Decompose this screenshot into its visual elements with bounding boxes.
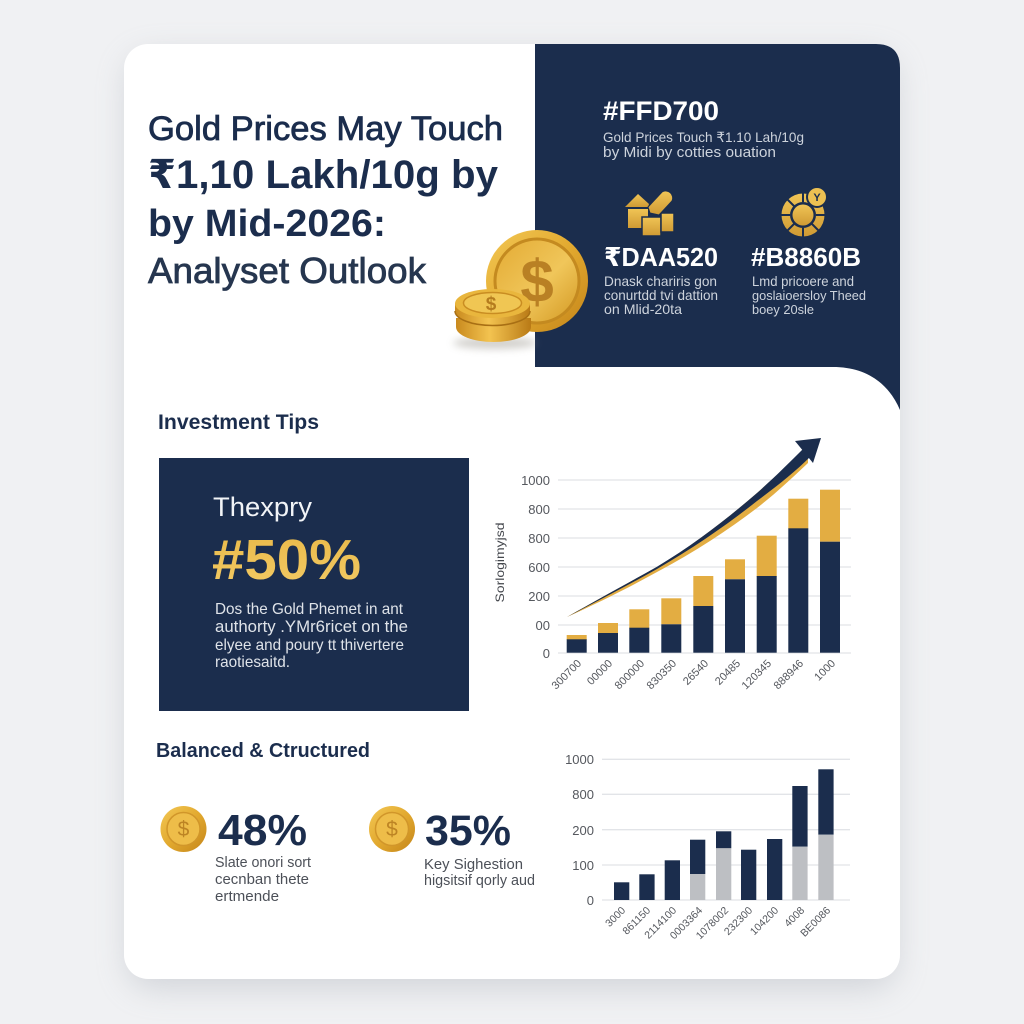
navy bar segments	[614, 769, 834, 900]
icon: coin 48: $	[178, 818, 190, 841]
x axis labels	[550, 658, 838, 692]
stat: 48%: Slate onori sort	[215, 854, 312, 871]
x axis labels: 2114100	[642, 905, 679, 941]
y axis labels: 800	[572, 787, 594, 802]
x axis labels: 104200	[748, 905, 781, 938]
icon: coin 35	[369, 806, 415, 852]
x axis labels: 830350	[645, 658, 679, 692]
panel: dark navy header block	[535, 44, 900, 410]
x axis labels: 300700	[550, 658, 584, 692]
stat: 48%: 48%	[218, 806, 307, 855]
x axis labels: 120345	[740, 658, 774, 692]
grey bar segments	[690, 835, 834, 900]
icon: coin 48	[160, 806, 206, 852]
y axis labels: 0	[543, 646, 550, 661]
gold bar segments	[567, 490, 840, 640]
illustration: gold coins: $	[486, 294, 497, 315]
x axis labels: 20485	[713, 658, 743, 688]
y axis labels: 1000	[565, 752, 594, 767]
stat: 35%: Key Sighestion	[424, 856, 523, 873]
x axis labels	[603, 905, 833, 942]
stat: DAA520	[604, 242, 718, 317]
callout body: Dos the Gold Phemet in ant	[215, 601, 404, 618]
stat: DAA520: on Mlid-20ta	[604, 301, 682, 317]
stat: FFD700	[603, 96, 804, 161]
stat: 48%	[215, 806, 312, 905]
x axis labels: 26540	[681, 658, 711, 688]
title: Analyset Outlook	[148, 250, 427, 291]
title	[148, 110, 503, 291]
x axis labels: 4008	[782, 905, 807, 930]
y axis labels: 600	[528, 560, 550, 575]
stat: FFD700: #FFD700	[603, 96, 719, 126]
stat: FFD700: by Midi by cotties ouation	[603, 144, 776, 161]
y axis labels: 0	[587, 893, 594, 908]
trend arrow	[567, 438, 821, 617]
heading: Investment Tips: Investment Tips	[158, 411, 319, 434]
y axis labels: 800	[528, 531, 550, 546]
x axis labels: 00000	[585, 658, 615, 688]
chart: gold and navy stacked bars with trend arrow	[493, 438, 851, 692]
stat: B8860B: Lmd pricoere and	[752, 273, 854, 289]
navy bar segments	[567, 528, 840, 653]
stat: DAA520: conurtdd tvi dattion	[604, 287, 718, 303]
icon: coin 35: $	[386, 818, 398, 841]
y axis labels: 00	[536, 618, 550, 633]
stat: B8860B: #B8860B	[751, 242, 861, 272]
callout body	[215, 601, 408, 671]
x axis labels: 3000	[603, 905, 628, 930]
y axis labels: 1000	[521, 473, 550, 488]
x axis labels: 1078002	[694, 905, 731, 942]
y axis labels: 800	[528, 502, 550, 517]
icon: gold chip coin	[781, 187, 827, 237]
x axis labels: 800000	[613, 658, 647, 692]
callout body: authorty .YMr6ricet on the	[215, 617, 408, 636]
stat: 48%: cecnban thete	[215, 871, 309, 888]
title: ₹1,10 Lakh/10g by	[148, 153, 499, 197]
panel: Thexpry callout	[159, 458, 469, 711]
y axis labels	[521, 473, 550, 661]
x axis labels: BE0086	[798, 905, 833, 940]
x axis labels: 888946	[772, 658, 806, 692]
stat: 48%: ertmende	[215, 888, 279, 905]
y axis labels: 100	[572, 858, 594, 873]
icon: gold boxes	[625, 191, 674, 236]
illustration: gold coins: $	[520, 248, 554, 315]
panel: Thexpry callout: Thexpry	[213, 492, 312, 522]
callout body: raotiesaitd.	[215, 654, 290, 671]
stat: DAA520: ₹DAA520	[604, 242, 718, 272]
y axis labels	[565, 752, 594, 908]
icon: gold chip coin: Y	[813, 192, 821, 204]
stat: 35%: 35%	[425, 807, 511, 855]
stat: DAA520: Dnask chariris gon	[604, 273, 717, 289]
heading: Balanced and Structured: Balanced & Ctructured	[156, 740, 370, 762]
x axis labels: 232300	[722, 905, 755, 938]
chart: navy and grey stacked bars	[565, 752, 850, 942]
illustration: gold coins	[453, 230, 588, 349]
stat: B8860B: boey 20sle	[752, 302, 814, 317]
title: by Mid-2026:	[148, 203, 386, 245]
title: Gold Prices May Touch	[148, 110, 503, 148]
callout body: elyee and poury tt thivertere	[215, 637, 404, 654]
y axis title: Sorlogimyjsd	[493, 522, 507, 602]
y axis labels: 200	[572, 823, 594, 838]
stat: B8860B: goslaioersloy Theed	[752, 288, 866, 303]
stat: 35%: higsitsif qorly aud	[424, 872, 535, 889]
x axis labels: 0003364	[668, 905, 705, 942]
card shadow	[128, 56, 896, 988]
x axis labels: 861150	[620, 905, 653, 937]
stat: B8860B	[751, 242, 866, 317]
y axis labels: 200	[528, 589, 550, 604]
x axis labels: 1000	[812, 658, 838, 683]
stat: 35%	[424, 807, 535, 889]
stat: FFD700: Gold Prices Touch ₹1.10 Lah/10g	[603, 129, 804, 145]
panel: main white card	[124, 44, 900, 979]
big number: #50%	[212, 528, 361, 592]
